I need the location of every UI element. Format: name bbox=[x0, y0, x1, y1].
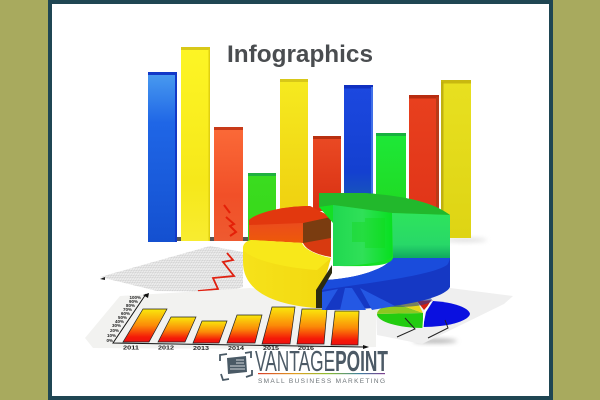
y axis labels: 10% bbox=[107, 333, 116, 338]
green column bbox=[376, 133, 406, 218]
green column bbox=[248, 173, 276, 241]
y axis labels bbox=[106, 295, 141, 343]
gradient bars bbox=[123, 307, 359, 345]
logo rainbow rule bbox=[258, 373, 385, 374]
y axis labels: 40% bbox=[115, 319, 124, 324]
yellow column bbox=[441, 80, 471, 238]
y axis labels: 70% bbox=[123, 307, 132, 312]
yellow column bbox=[280, 79, 308, 214]
red column bbox=[313, 136, 341, 211]
y axis labels: 0% bbox=[106, 338, 113, 343]
red column bbox=[409, 95, 439, 225]
x axis year labels: 2011 bbox=[123, 346, 139, 352]
blue column bbox=[344, 85, 373, 210]
red line chart bbox=[198, 253, 234, 291]
axis arrowheads bbox=[143, 293, 369, 349]
yellow slice bbox=[243, 240, 332, 308]
logo tagline: SMALL BUSINESS MARKETING bbox=[258, 378, 385, 385]
x axis year labels: 2015 bbox=[263, 346, 279, 352]
pie cast shadow bbox=[364, 293, 432, 307]
logo: Vantage Point bbox=[220, 346, 388, 385]
green slice bbox=[319, 193, 450, 266]
y axis labels: 30% bbox=[112, 323, 121, 328]
bar chart: 3D coloured columns bbox=[148, 47, 487, 242]
x axis year labels: 2016 bbox=[298, 346, 314, 352]
y axis labels: 50% bbox=[118, 315, 127, 320]
x axis year labels: 2012 bbox=[158, 346, 174, 352]
arrowhead bbox=[100, 277, 105, 280]
tall yellow column bbox=[181, 47, 210, 241]
logo wordmark: VANTAGEPOINT bbox=[255, 346, 388, 378]
blue column bbox=[148, 72, 177, 242]
pie chart paper bbox=[364, 288, 513, 344]
x axis year labels bbox=[123, 346, 314, 352]
paper pie chart bbox=[377, 300, 470, 328]
x axis year labels: 2014 bbox=[228, 346, 244, 352]
line chart paper bbox=[100, 246, 243, 292]
orange column bbox=[214, 127, 243, 241]
callout lines bbox=[397, 318, 448, 338]
bar chart paper bbox=[85, 288, 376, 352]
y axis labels: 20% bbox=[110, 328, 119, 333]
logo icon bbox=[220, 352, 252, 380]
axes bbox=[113, 294, 363, 347]
x axis year labels: 2013 bbox=[193, 346, 209, 352]
y axis labels: 80% bbox=[126, 303, 135, 308]
red slice bbox=[249, 206, 331, 257]
y axis labels: 100% bbox=[129, 295, 141, 300]
blue slice bbox=[322, 256, 450, 310]
3D pie chart bbox=[243, 193, 450, 310]
title: Infographics bbox=[227, 41, 373, 68]
y axis labels: 90% bbox=[129, 299, 138, 304]
y axis labels: 60% bbox=[121, 311, 130, 316]
